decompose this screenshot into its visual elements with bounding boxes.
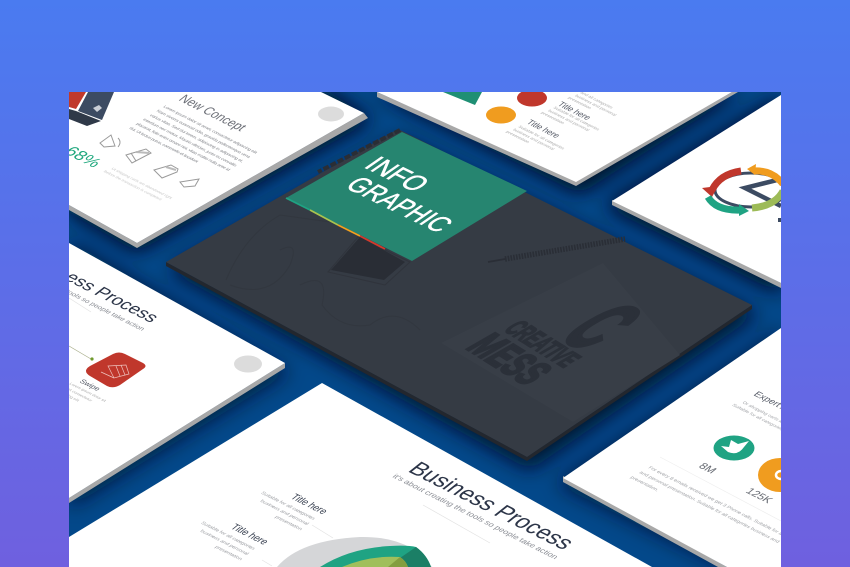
title item one [260, 492, 333, 538]
swipe description: adipiscing elit [55, 388, 81, 403]
icon: orange circle [486, 106, 516, 124]
panel: new concept slide [61, 92, 368, 248]
underline [69, 298, 91, 312]
title item two: Title here [228, 522, 271, 547]
page number badge [234, 356, 262, 372]
title item one: Suitable for all categories [552, 106, 601, 131]
label: swipe: Swipe [77, 378, 103, 392]
heading: new concept: New Concept [176, 92, 251, 133]
title item two: business and personal [512, 128, 556, 151]
title: info graphic: INFO [357, 153, 436, 197]
title item one: Title here [288, 492, 330, 517]
title: info graphic: GRAPHIC [338, 173, 459, 237]
subtitle: it's about creating the tools so people take action [1, 257, 146, 332]
panel: business process slide left [69, 243, 285, 503]
main dark cover board [166, 129, 752, 461]
title item two: business and personal [198, 529, 250, 556]
paragraph: Nam viverra euismod odio, gravida pellentesque urna [155, 109, 252, 159]
panel: expert slide [563, 328, 781, 567]
paragraph: and personal presentation. Suitable for all categories business and [638, 470, 781, 544]
caption: Ut shipping carts are abandoned right [110, 167, 174, 200]
paragraph: Lorem ipsum dolor sit amet, consectetur adipiscing elit [162, 105, 259, 155]
icon: twitter circle [714, 436, 754, 460]
description: Or shopping carts are abandoned [741, 401, 811, 438]
stat: 125K: 125K [743, 486, 776, 506]
icon: megaphone [100, 135, 120, 147]
title item one: business and personal [547, 109, 591, 132]
title item one: Suitable for all categories [259, 491, 317, 521]
notebook [441, 263, 680, 422]
title item two: Suitable for all categories [517, 125, 566, 150]
paragraph: presentation. [629, 475, 660, 493]
mockup scene [69, 92, 781, 567]
title item one: presentation [540, 111, 566, 125]
small text fragment: presentation [567, 96, 593, 110]
title: info graphic [338, 153, 459, 237]
title item two [506, 119, 564, 150]
logo: creative mess: CREATIVE [497, 316, 588, 371]
connector line [69, 346, 94, 361]
swipe description: Lorem ipsum dolor sit [68, 382, 108, 403]
icon: stack [126, 149, 151, 163]
stat: 8M: 8M [696, 461, 719, 476]
title item one: Title here [555, 100, 594, 122]
icon: red rounded tile [86, 352, 146, 387]
title item two [200, 522, 272, 566]
icon: orange circle [758, 458, 802, 492]
title item two: presentation [213, 545, 244, 562]
title item one: business and personal [258, 499, 310, 526]
title item one [540, 101, 600, 131]
paragraph: For every 8 emails received we get 3 Phone calls. Suitable for all [647, 466, 786, 537]
stat: 68 percent: 68% [61, 143, 106, 170]
page number badge [318, 106, 344, 122]
rainbow stripe [286, 198, 385, 249]
phone [328, 237, 410, 285]
icon: red circle [517, 92, 547, 106]
swipe description: amet consectetur [61, 385, 94, 402]
panel: top slide [377, 89, 738, 186]
description: Suitable for all categories business [730, 403, 804, 442]
heading: expert advice: Expert Advice [751, 390, 811, 423]
panel: clock slide [612, 95, 787, 288]
heading: business process: Business Process [21, 249, 164, 325]
icon: wallet [154, 165, 178, 178]
logo: creative mess [456, 291, 666, 391]
logo: creative mess: C [539, 291, 666, 362]
subtitle: it's about creating the tools so people take action [391, 473, 560, 561]
teal cover panel [286, 132, 527, 261]
title item two: Suitable for all categories [199, 521, 257, 551]
title item one: presentation [273, 515, 304, 532]
logo: creative mess: MESS [456, 327, 563, 391]
paragraph: placerat, felis enim ornare nisi, vitae mattis nulla ante id [135, 122, 232, 172]
small text fragment: and all categories [579, 91, 614, 109]
paragraph: interdum nec metus. Mauris ultricies, justo eu convallis [142, 118, 239, 168]
underline [423, 505, 490, 543]
paragraph [130, 105, 258, 171]
paragraph: dui. Ut lectus purus, commodo et tincidunt [128, 126, 200, 164]
pencil [488, 239, 625, 262]
caption: Before the transaction is completed [103, 169, 163, 201]
heading: business process: Business Process [402, 458, 580, 554]
icon: tag [180, 179, 199, 187]
paragraph: varius vitae. Sed dui lorem, adipiscing in adipiscing et, [149, 113, 245, 163]
divider [660, 457, 781, 521]
panel: business process slide bottom [69, 383, 652, 567]
title item two: Title here [524, 118, 563, 140]
teal shape [443, 92, 482, 105]
cube graphic [69, 92, 114, 126]
small text fragment: business and personal [574, 94, 618, 117]
title item two: presentation [505, 130, 531, 144]
clock cycle diagram [702, 164, 787, 220]
embossed texture [226, 130, 420, 330]
description [732, 402, 781, 430]
chart: layered dome [277, 537, 432, 567]
